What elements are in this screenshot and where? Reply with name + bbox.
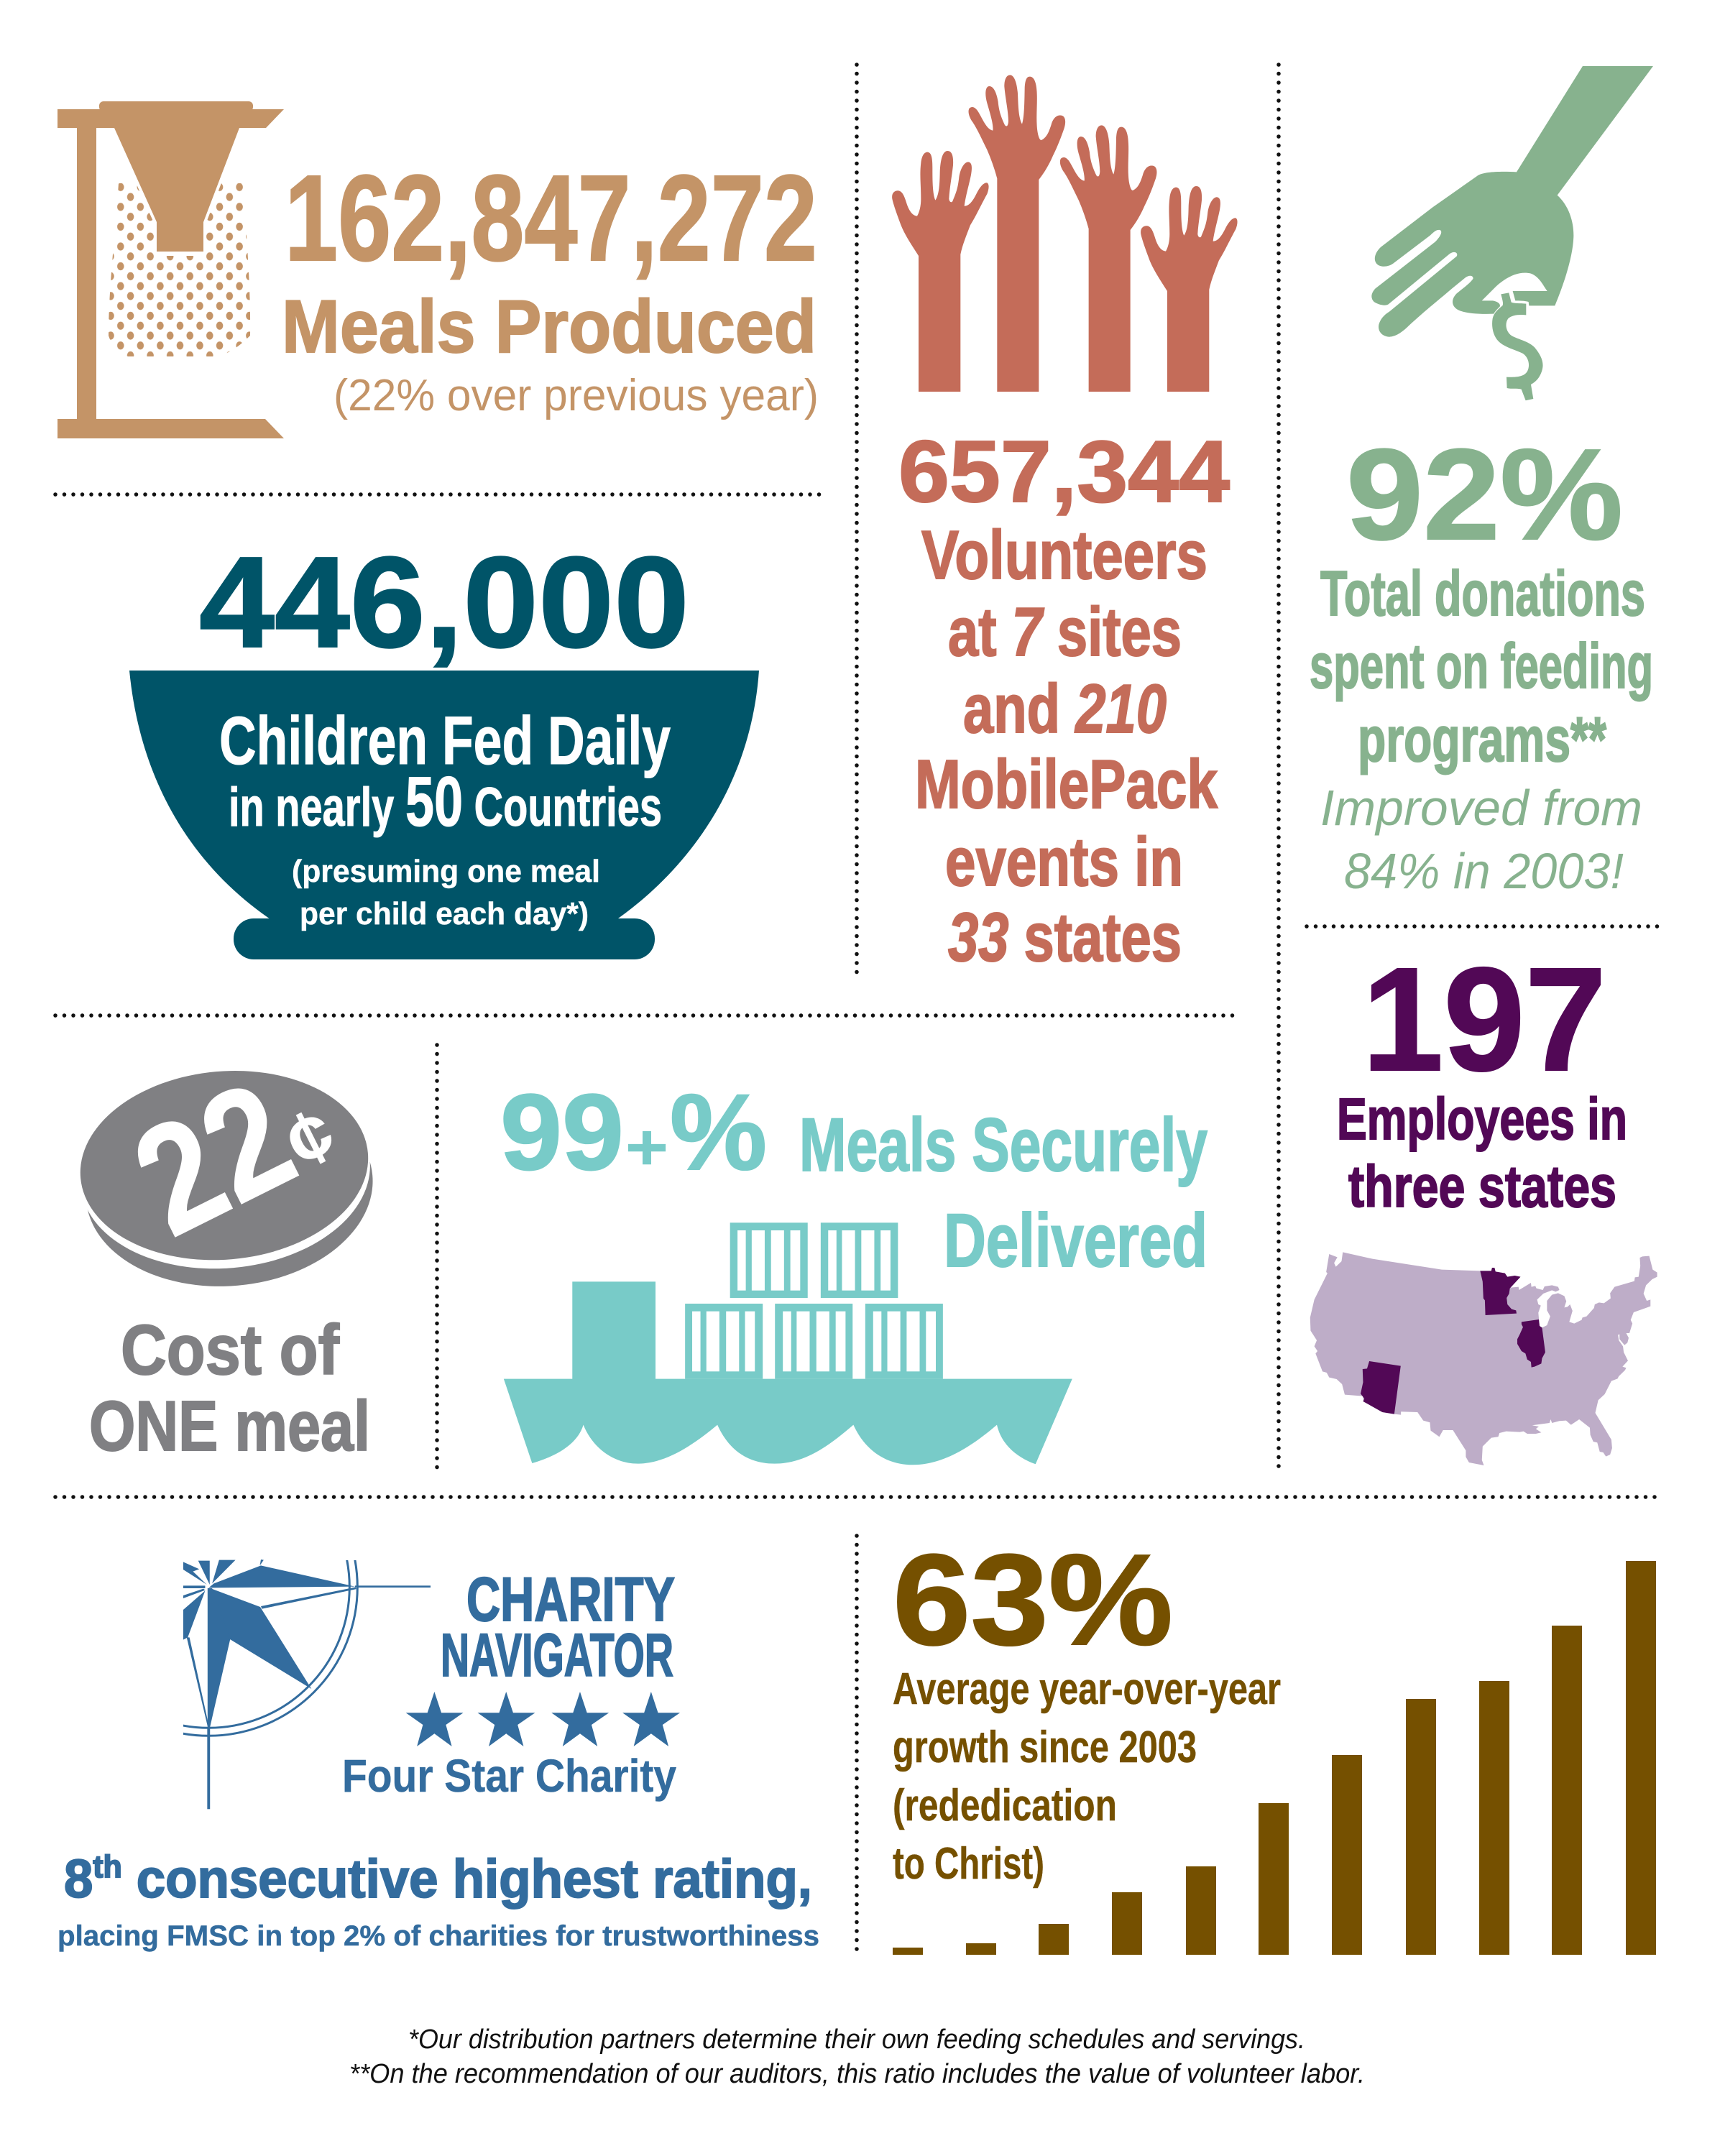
text: programs: programs** [1358, 704, 1607, 775]
text: eighth consecutive highest rating: th [93, 1849, 122, 1884]
panel: growth [893, 1528, 1656, 1955]
text: in nearly 50 countries: in nearly 50 Countries [229, 762, 662, 841]
panel: cost per meal [73, 1048, 381, 1465]
icon: raised hands [892, 75, 1238, 392]
text: volunteers line 3: and 210 [963, 671, 1167, 747]
icon: bowl [129, 671, 759, 959]
text: improved from: Improved from [1320, 780, 1642, 836]
text: eighth consecutive highest rating: consecutive highest rating, [122, 1848, 812, 1909]
big number: children: 446,000 [199, 530, 689, 675]
icon: meal packing funnel [58, 101, 284, 438]
bar chart: yearly growth [893, 1561, 1656, 1955]
text: four star charity: Four Star Charity [342, 1750, 676, 1802]
text: cost of: Cost of [121, 1310, 339, 1389]
text: volunteers line 5: events in [945, 824, 1183, 900]
big number: percent to programs: 92% [1346, 423, 1623, 567]
icon: coin [73, 1059, 381, 1298]
panel: employees [1310, 937, 1657, 1465]
text: average growth line 1: Average year-over-year [893, 1664, 1281, 1714]
text: meals securely: Meals Securely [799, 1103, 1208, 1187]
heading: meals produced: Meals Produced [282, 285, 816, 369]
footnote 2: **On the recommendation of our auditors, this ratio includes the value of volunteer labor. [349, 2059, 1365, 2089]
text: volunteers line 2: at 7 sites [948, 594, 1182, 671]
text: volunteers line 1: Volunteers [921, 517, 1208, 594]
icon: hand dropping dollar [1371, 66, 1653, 400]
text: per child each day: per child each day*) [300, 896, 589, 931]
text: presuming one meal: (presuming one meal [292, 854, 600, 889]
text: average growth line 3: (rededication [893, 1781, 1117, 1830]
big number: employees: 197 [1362, 937, 1606, 1102]
big number: growth: 63% [893, 1528, 1173, 1672]
icon: four stars [406, 1692, 680, 1746]
note: growth over previous year: (22% over previous year) [334, 371, 819, 420]
text: average growth line 4: to Christ) [893, 1839, 1044, 1889]
coin label: cent sign: ¢ [271, 1089, 349, 1187]
big number: plus: + [625, 1112, 668, 1184]
big number: 99: 99 [500, 1072, 624, 1192]
icon: charity navigator compass [183, 1560, 431, 1810]
text: children fed daily: Children Fed Daily [219, 703, 671, 779]
footnote 1: *Our distribution partners determine their own feeding schedules and servings. [408, 2024, 1305, 2055]
text: volunteers line 4: MobilePack [915, 746, 1218, 823]
panel: donations [1310, 66, 1653, 899]
panel: volunteers [892, 75, 1238, 976]
coin label: 22: 22 [109, 1048, 318, 1268]
panel: meals delivered [500, 1072, 1208, 1465]
big number: meals: 162,847,272 [285, 150, 817, 287]
map: United States with highlighted states [1310, 1252, 1657, 1465]
text: delivered: Delivered [944, 1199, 1208, 1283]
text: volunteers line 6: 33 states [948, 899, 1182, 976]
text: employees in: Employees in [1337, 1087, 1627, 1152]
text: average growth line 2: growth since 2003 [893, 1723, 1197, 1772]
footnotes [349, 2024, 1365, 2089]
text: eighth consecutive highest rating: 8 [64, 1848, 94, 1909]
panel: children fed [129, 530, 759, 959]
text: navigator: NAVIGATOR [441, 1621, 673, 1689]
big number: percent: % [670, 1072, 767, 1192]
icon: cargo ship [504, 1222, 1072, 1465]
panel: charity navigator [58, 1438, 819, 1952]
text: top 2 percent: placing FMSC in top 2% of charities for trustworthiness [58, 1920, 819, 1952]
text: charity: CHARITY [466, 1565, 675, 1634]
text: 84 percent in 2003: 84% in 2003! [1344, 843, 1624, 899]
big number: volunteers: 657,344 [898, 423, 1230, 520]
text: three states: three states [1348, 1154, 1616, 1220]
text: one meal: ONE meal [89, 1386, 370, 1465]
panel: meals produced [58, 101, 819, 438]
